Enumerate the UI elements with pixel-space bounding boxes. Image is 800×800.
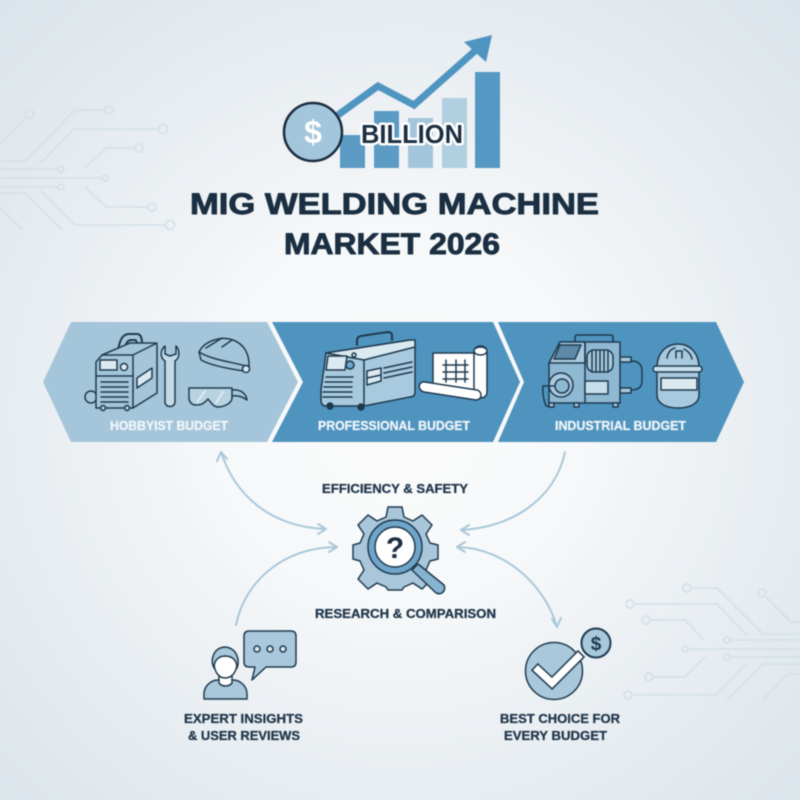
title xyxy=(190,188,599,261)
rising arrow xyxy=(338,35,492,115)
dollar coin: $ xyxy=(304,114,322,150)
label: best choice: BEST CHOICE FOR xyxy=(500,711,621,726)
label: expert insights xyxy=(184,711,303,743)
block: best choice for every budget xyxy=(500,628,621,743)
icon: safety goggles xyxy=(189,388,247,407)
title: MIG WELDING MACHINE xyxy=(190,188,599,221)
icon: person xyxy=(204,647,247,699)
circuit pattern: bottom right xyxy=(624,584,800,700)
heading: research and comparison: RESEARCH & COMPARISON xyxy=(315,606,496,621)
icon: hobbyist welder xyxy=(85,334,157,410)
label: hobbyist budget: HOBBYIST BUDGET xyxy=(110,419,228,433)
icon: welding helmet xyxy=(199,338,250,372)
icon: check circle xyxy=(526,642,582,700)
label: industrial budget: INDUSTRIAL BUDGET xyxy=(555,419,686,433)
icon: gear with magnifier xyxy=(353,507,445,594)
icon: blueprint roll xyxy=(419,346,487,400)
icon: professional welder xyxy=(321,332,415,410)
panel: professional budget xyxy=(272,322,520,442)
label: expert insights: EXPERT INSIGHTS xyxy=(184,711,303,726)
label: expert insights: & USER REVIEWS xyxy=(188,728,300,743)
circuit pattern: top left xyxy=(0,106,174,230)
icon: industrial helmet xyxy=(653,344,702,408)
title: MARKET 2026 xyxy=(284,228,500,261)
label: best choice xyxy=(500,711,621,743)
growth chart icon with billion badge xyxy=(284,35,500,168)
panel: hobbyist budget xyxy=(43,322,298,442)
arrow: gear to best choice xyxy=(457,542,561,627)
label: best choice: EVERY BUDGET xyxy=(504,728,607,743)
arrow: hobbyist to gear xyxy=(217,452,326,534)
billion label: BILLION xyxy=(361,119,463,149)
icon: industrial machine xyxy=(543,335,642,407)
label: professional budget: PROFESSIONAL BUDGET xyxy=(318,419,470,433)
dollar coin xyxy=(284,103,342,161)
heading: efficiency and safety: EFFICIENCY & SAFETY xyxy=(322,481,468,496)
icon: wrench xyxy=(161,346,179,406)
bar chart xyxy=(340,72,500,168)
block: expert insights and user reviews xyxy=(184,631,303,743)
icon: speech bubble xyxy=(244,631,296,680)
arrow: industrial to gear xyxy=(461,452,565,535)
icon: gear with magnifier: ? xyxy=(386,532,404,565)
panel: industrial budget xyxy=(498,322,744,442)
icon: dollar badge: $ xyxy=(591,634,602,655)
arrow: expert insights to gear xyxy=(236,542,337,625)
